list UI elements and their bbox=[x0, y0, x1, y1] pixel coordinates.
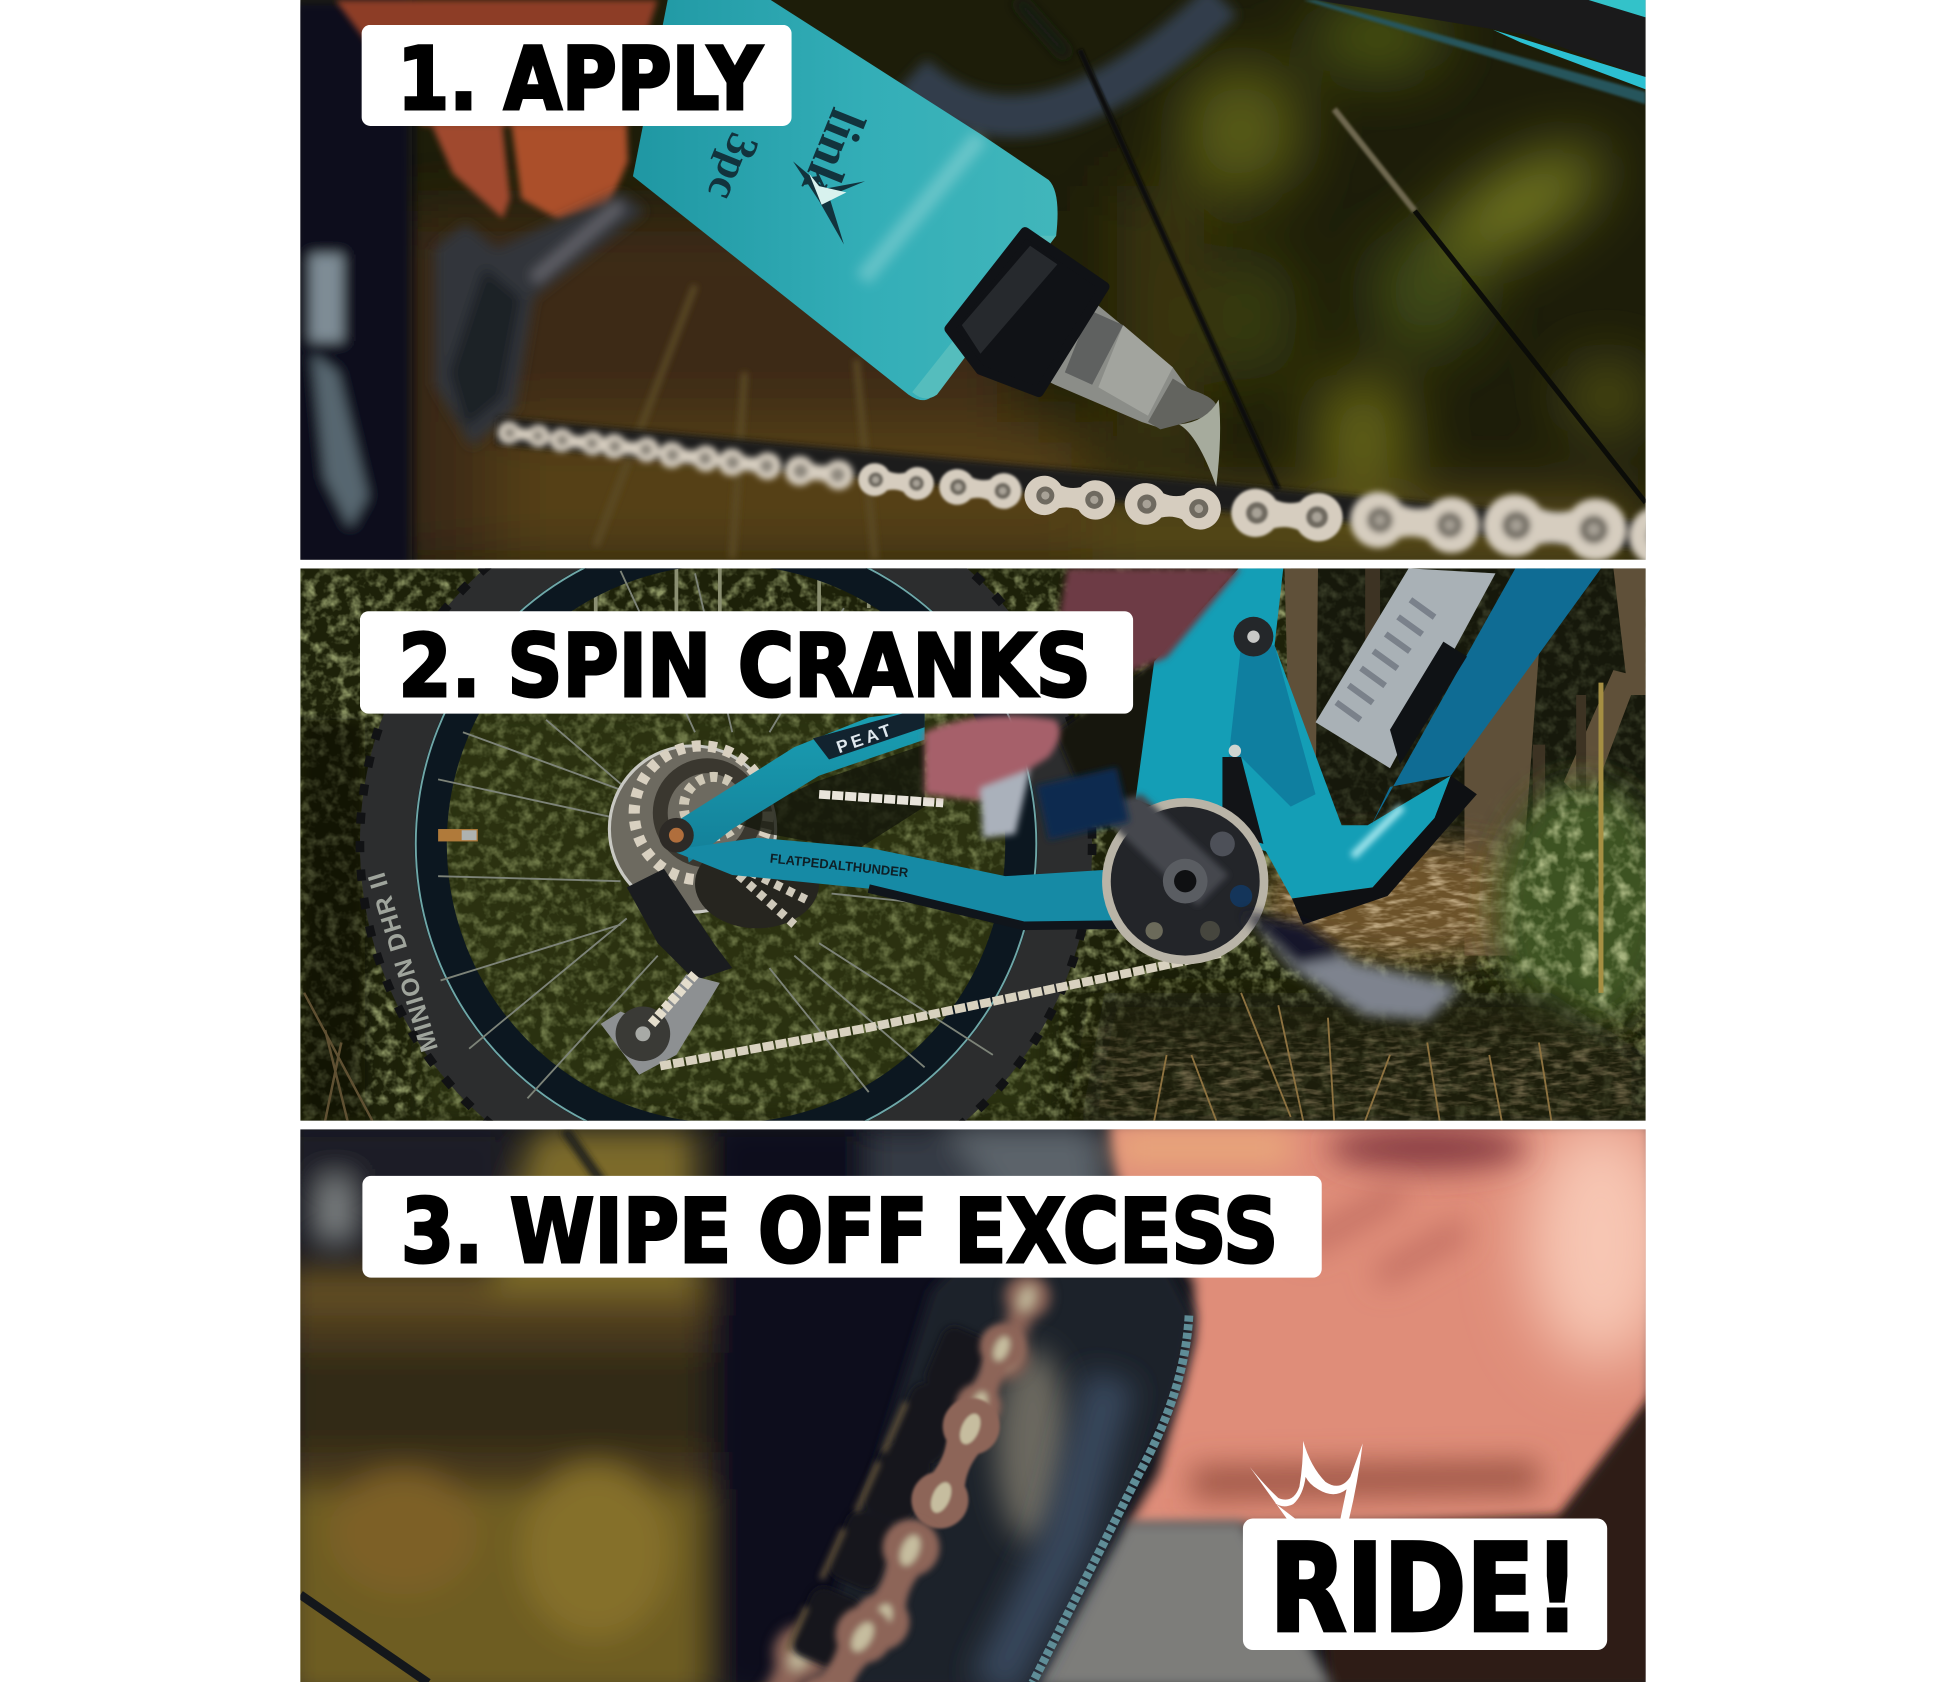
label: ride: RIDE! bbox=[1270, 1518, 1580, 1660]
bottle label text: 3pc bbox=[698, 127, 769, 207]
chainstay and seatstay bbox=[659, 707, 1123, 926]
pedal and foot bbox=[1241, 912, 1462, 1020]
bottle label text: link bbox=[790, 101, 876, 203]
fork leg bbox=[293, 0, 412, 571]
chainstay and seatstay: PEAT bbox=[834, 719, 897, 757]
panel: step 1 apply photo bbox=[300, 0, 1646, 560]
thin dark spoke bbox=[300, 1129, 608, 1682]
nozzle and lube drip bbox=[1044, 300, 1220, 486]
bike frame top right bbox=[1303, 0, 1646, 104]
valve bbox=[438, 829, 478, 841]
chainstay and seatstay: FLATPEDALTHUNDER bbox=[769, 851, 910, 880]
rag bbox=[807, 1229, 1333, 1682]
forest background bbox=[248, 568, 1669, 1129]
infographic: chain lube steps bbox=[300, 0, 1646, 1682]
label: 1. apply: 1. APPLY bbox=[397, 29, 763, 130]
spokes bbox=[596, 50, 1646, 560]
chain bbox=[496, 420, 1767, 566]
water bottle bbox=[1316, 568, 1495, 768]
hand bbox=[335, 0, 658, 220]
bottle label text bbox=[708, 106, 867, 198]
hand and sleeve bbox=[925, 568, 1241, 838]
tire lettering: MINION DHR II bbox=[363, 868, 444, 1055]
chainring and crank bbox=[1042, 794, 1268, 964]
panel: step 3 wipe off excess photo bbox=[285, 1117, 1675, 1682]
label: 2. spin cranks: 2. SPIN CRANKS bbox=[398, 616, 1091, 717]
icon: crown bbox=[1250, 1441, 1363, 1519]
spokes bbox=[438, 571, 1067, 1098]
panel: step 2 spin cranks photo bbox=[248, 478, 1669, 1210]
background foliage bokeh bbox=[397, 0, 1647, 571]
rear derailleur bbox=[601, 869, 732, 1075]
lower chain bbox=[660, 953, 1222, 1066]
hand bbox=[1110, 1117, 1675, 1526]
dark background bottom right bbox=[1316, 1390, 1657, 1682]
derailleur bbox=[434, 192, 645, 447]
nozzle cap bbox=[949, 232, 1105, 392]
rotor and rear wheel blur bbox=[912, 0, 1222, 116]
main frame bbox=[1136, 568, 1601, 925]
dark trunk behind hand bbox=[1055, 658, 1160, 819]
label: 3. wipe off excess: 3. WIPE OFF EXCESS bbox=[401, 1180, 1278, 1283]
rear wheel bbox=[360, 478, 1092, 1210]
blurred background bbox=[285, 1123, 1117, 1682]
lube bottle bbox=[633, 0, 1058, 400]
dirty chain bbox=[723, 1267, 1057, 1682]
upper chain bbox=[819, 794, 943, 803]
grass lines bbox=[1154, 993, 1551, 1121]
cassette bbox=[608, 745, 819, 928]
